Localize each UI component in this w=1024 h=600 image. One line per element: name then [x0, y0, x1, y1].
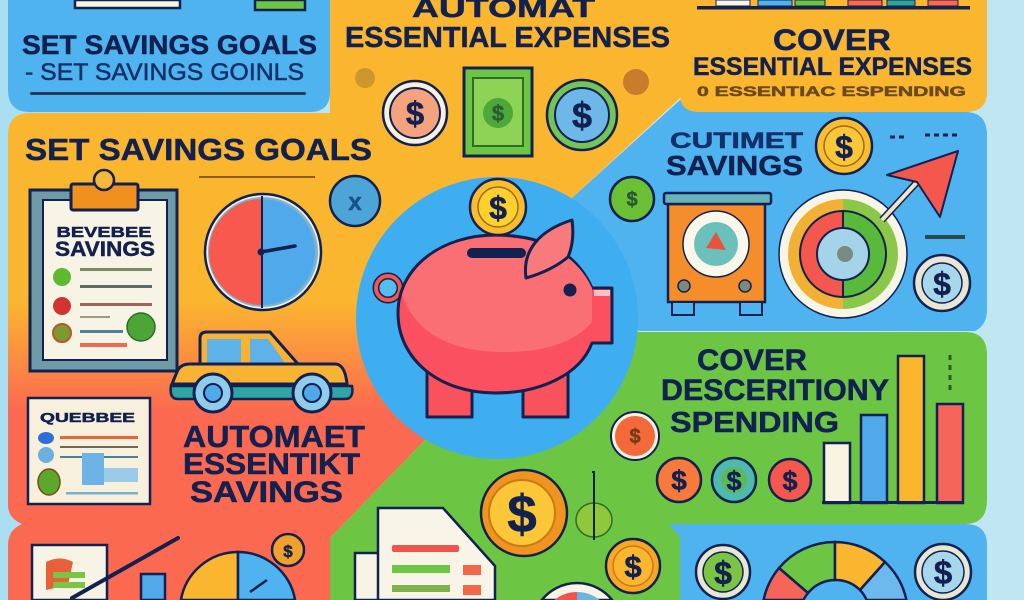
panel: warm left and top centre background: [8, 0, 680, 600]
heading: set savings goals: SET SAVINGS GOALS: [25, 132, 372, 167]
icon: green coin: [696, 545, 750, 599]
icon: pie chart: [181, 552, 295, 600]
panel: blue bottom right: [669, 524, 987, 600]
icon: small bag: [623, 69, 649, 95]
icon: small scale: [355, 68, 375, 88]
panel: top right yellow: [680, 0, 987, 112]
icon: pig tail: [376, 276, 400, 300]
icon: document stack: [355, 508, 495, 600]
icon: green coin: $: [714, 555, 732, 591]
heading: cover: COVER: [697, 344, 807, 377]
icon: small green coin: [610, 177, 654, 221]
icon: yellow car: [171, 332, 352, 412]
rule: [30, 92, 306, 95]
heading: automate essential savings: [183, 419, 365, 509]
heading: discretionary: DESCERITIONY: [661, 374, 889, 407]
icon: orange badge: $: [629, 426, 641, 448]
icon: report card: QUEBBEE: [40, 410, 135, 425]
panel: blue right: [497, 100, 987, 331]
heading: automate essential savings: AUTOMAET: [183, 419, 365, 454]
pig body: [398, 235, 612, 393]
icon: small green coin: $: [626, 189, 638, 211]
pig eye: [564, 284, 576, 296]
icon: blue coin: $: [572, 95, 592, 136]
heading: cover: COVER: [773, 24, 891, 57]
icon: coin entering slot: [470, 179, 526, 235]
icon: silver coin: [914, 255, 970, 311]
icon: large gold coin: $: [507, 485, 537, 544]
icon: small dashes: [890, 135, 960, 137]
icon: blue coin: [915, 544, 971, 600]
section: outline savings: [610, 118, 970, 318]
icon: yellow coin: [816, 118, 872, 174]
arrow: red arrow up right: [882, 151, 958, 220]
pig body highlight: [402, 237, 592, 352]
icon: green bill: [464, 68, 532, 156]
icon: report card: [28, 398, 150, 504]
icon: blue x badge: x: [348, 189, 362, 216]
icon: blue bar: [141, 574, 165, 600]
icon: silver coin: $: [933, 266, 951, 302]
heading: savings: SAVINGS: [666, 150, 803, 181]
icon: green bill: $: [492, 101, 504, 126]
icon: peach coin: [383, 81, 447, 145]
heading: automate essential savings: ESSENTIKT: [183, 448, 360, 481]
heading: spending: SPENDING: [670, 407, 839, 439]
pig ear: [525, 220, 573, 278]
section: set savings goals main: [25, 132, 380, 509]
icon: donut target: [779, 190, 907, 318]
subheading: set savings goals: - SET SAVINGS GOINLS: [25, 59, 304, 86]
icon: orange badge: [611, 412, 659, 460]
icon: segmented gauge: [764, 542, 906, 600]
icon: teal coin: [712, 458, 756, 502]
icon: coin entering slot: $: [489, 190, 507, 226]
icon: clock gauge: [205, 194, 321, 310]
icon: small item: [925, 235, 965, 239]
icon: orange coin: [657, 458, 701, 502]
icon: peach coin: $: [406, 95, 424, 132]
heading: set savings goals: SET SAVINGS GOALS: [22, 30, 317, 60]
icon: orange coin: [606, 539, 660, 593]
rule above clock: [199, 176, 315, 178]
icon: small marks: [948, 355, 952, 390]
section: automate essential expenses: [345, 0, 670, 156]
icon: blue coin: [547, 80, 617, 150]
icon: top white card: [75, 0, 180, 8]
icon: large gold coin: [481, 470, 567, 556]
section: bottom right gauge and coins: [696, 542, 971, 600]
icon: checklist clipboard: BEVEBEE: [56, 224, 152, 241]
icon: orange coin: $: [671, 465, 687, 496]
caption: essential spending: 0 ESSENTIAC ESPENDING: [697, 83, 966, 99]
section: bottom left charts: [32, 534, 304, 600]
panel: green right and bottom centre: [330, 300, 987, 600]
icon: yellow coin: $: [835, 129, 853, 165]
icon: top green card: [255, 0, 305, 10]
icon: small green circle: [576, 472, 612, 540]
icon: small dark badge: [272, 534, 304, 566]
icon: teal coin: $: [726, 466, 742, 496]
line: trend: [72, 538, 178, 598]
icon: checklist clipboard: SAVINGS: [55, 238, 155, 261]
heading: outline: CUTIMET: [670, 128, 804, 153]
icon: small chart card: [32, 545, 107, 600]
icon: checklist clipboard: [30, 170, 177, 371]
pig snout highlight: [594, 290, 610, 296]
central piggy bank circle: [356, 177, 638, 459]
section: cover discretionary spending: [611, 344, 964, 504]
icon: blue coin: $: [934, 554, 952, 591]
section: bottom centre documents and coins: [355, 470, 660, 600]
bar chart: [822, 356, 964, 504]
icon: orange coin: $: [624, 549, 642, 584]
icon: red coin: [769, 459, 811, 501]
icon: piggy bank: [398, 220, 612, 417]
icon: red coin: $: [782, 466, 798, 496]
icon: partial pie: [542, 583, 612, 600]
heading: automate essential savings: SAVINGS: [190, 476, 343, 509]
subheading: essential expenses: ESSENTIAL EXPENSES: [345, 22, 670, 54]
icon: book shelf: [697, 0, 970, 10]
panel: set savings goals top: [8, 0, 330, 112]
subheading: essential expenses: ESSENTIAL EXPENSES: [693, 53, 972, 81]
icon: small dark badge: $: [283, 542, 293, 561]
icon: blue x badge: [330, 176, 380, 226]
icon: orange safe: [664, 193, 771, 315]
pig legs: [427, 370, 568, 417]
pig slot: [467, 248, 526, 258]
